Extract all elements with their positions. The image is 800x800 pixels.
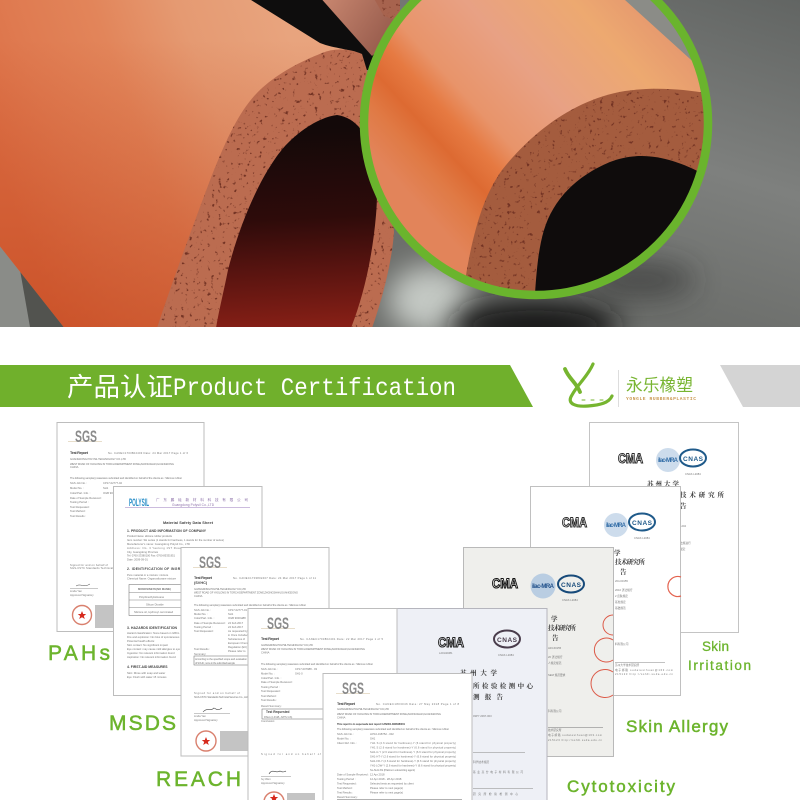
certificate: SGS report fourth sheet: Test Method :	[261, 694, 277, 698]
certificate: MSDS sheet: Tel: 0760-23380100 Fax: 0760-85331951	[127, 554, 176, 558]
certificate: skin allergy report back sheet: 电子邮箱 sudatesthuan@163.com	[615, 668, 674, 672]
certificate: skin irritation report: 1204	[680, 524, 686, 528]
magnified tube surface	[368, 0, 701, 276]
SGS logo: SGS	[267, 614, 289, 633]
certificate: SGS cytotoxicity report front sheet: Date of Sample Received :	[337, 772, 369, 776]
result box	[262, 709, 324, 719]
certificate: bluish report sheet: 03PY 2097-003	[473, 714, 492, 718]
signature: Ivy Wen	[261, 777, 271, 781]
certificate: MSDS sheet	[114, 486, 262, 696]
certificate: SGS report fourth sheet: Color/Part. Info. :	[261, 676, 282, 680]
certificate: SGS cytotoxicity report front sheet: SH1	[370, 736, 376, 740]
certificate: cytotoxicity report textured sheet: SEM 规范要求	[548, 673, 566, 677]
SGS logo	[261, 614, 295, 633]
certificate: PAHs SGS report: Test Method :	[70, 509, 86, 513]
certificate: SGS cytotoxicity report front sheet: SH1-G Y (2.6 stand for hardness)-Y (6.6 stand for physical property)	[370, 750, 456, 754]
certificate: skin allergy report back sheet	[530, 486, 681, 696]
signature	[261, 771, 291, 785]
certificate: MSDS sheet: Eye: Flush with water 15 minutes	[127, 675, 167, 679]
company logo	[565, 364, 696, 407]
certificate: REACH SVHC report: The following sample(s) was/were submitted and identified on behalf of the clients as : Silicone rubber	[194, 603, 306, 607]
certificate: MSDS sheet: Ingestion: No relevant information found	[127, 651, 175, 655]
CMA mark: CMA	[492, 575, 518, 591]
hero photo: silicone foam tubes	[0, 0, 800, 349]
certificate: MSDS sheet: Pure material or a mixture: mixture	[127, 573, 169, 577]
certificate: SGS cytotoxicity report front sheet: Test Results :	[337, 790, 353, 794]
certificate: MSDS sheet: 3. HAZARDS IDENTIFICATION	[127, 626, 178, 630]
certificate: MSDS sheet: Manufacturer's name: Guangdong Polysil Co., LTD	[127, 542, 190, 546]
green title band	[0, 365, 533, 407]
SGS logo	[193, 553, 227, 572]
certificate: REACH SVHC report: Regulation (EC)	[228, 645, 247, 649]
certificate: PAHs SGS report: Testing Period :	[70, 500, 89, 504]
certificate: REACH SVHC report: (SVHC)	[194, 581, 208, 585]
red stamps	[591, 615, 613, 698]
certificate: REACH SVHC report: in Once Included	[228, 633, 249, 637]
CMA mark: CMA	[618, 450, 643, 466]
certificate: MSDS sheet: 4. FIRST-AID MEASURES	[127, 665, 168, 669]
ingredients table: Polydimethylsiloxane	[139, 595, 165, 599]
certificate: SGS cytotoxicity report front sheet: This report is to supersede test report CAN001-090848/001	[337, 722, 406, 726]
certificate: MSDS sheet: Hazard classification: None based on GBCL	[127, 631, 180, 635]
certificate: REACH SVHC report: Model No. :	[194, 612, 208, 616]
ingredients table: Silicon Dioxide	[146, 602, 164, 606]
certificate: SGS cytotoxicity report front sheet: Client Ref. Info. :	[337, 741, 357, 745]
certificate: SGS report fourth sheet: Test Results :	[261, 698, 277, 702]
red stamp	[264, 792, 284, 800]
QR block	[287, 793, 315, 800]
certificate: skin allergy report back sheet: 技术研究所	[615, 557, 646, 566]
CNAS mark: CNAS L2084	[634, 536, 650, 540]
red stamp	[668, 576, 681, 596]
certificate: skin allergy report back sheet: 215123 http://ssfdt.suda.edu.cn	[615, 672, 674, 676]
logo mark	[565, 364, 612, 406]
certificate: MSDS sheet: Product Name: silicone rubber products	[127, 534, 173, 538]
certificate: SGS cytotoxicity report front sheet: YH1 S (2.6 stand for hardness)-Y (6.6 stand for physical property)	[370, 746, 456, 750]
SGS logo	[68, 427, 102, 446]
certificate: cytotoxicity report textured sheet: 215123 http://ssfdt.suda.edu.cn	[548, 738, 602, 742]
certificate: cytotoxicity report textured sheet: 20 济法规行	[548, 655, 563, 659]
certificate: SGS cytotoxicity report front sheet: Test Report	[337, 702, 356, 706]
CNAS mark	[558, 576, 584, 602]
certificate: SGS cytotoxicity report front sheet: 12 Apr 2018 - 28 Apr 2018	[370, 777, 402, 781]
ilac mark	[604, 513, 628, 537]
certificate: SGS cytotoxicity report front sheet: Selected tests as requested by client	[370, 782, 414, 786]
certificate: cytotoxicity report textured sheet: 电子邮箱 sudatesthuan@163.com	[548, 733, 603, 737]
certificate: REACH SVHC report: CP17-02777-01	[228, 608, 247, 612]
certificate: SGS report fourth sheet: Test Requested :	[261, 689, 281, 693]
certificate: MSDS sheet: Aspiration: No relevant information found	[127, 655, 176, 659]
section title: 产品认证	[67, 367, 173, 404]
certificate: cytotoxicity report textured sheet	[464, 548, 614, 756]
rear tube	[318, 0, 400, 56]
certificate: REACH SVHC report: European Chemicals	[228, 641, 254, 645]
certificate: MSDS sheet: Skin: Rinse with soap and water	[127, 671, 165, 675]
certificate: SGS report fourth sheet: Testing Period :	[261, 685, 280, 689]
certificate: bluish report sheet: 所检验检测中心	[473, 681, 534, 690]
certificate: REACH SVHC report: of SVHC, none in the submitted sample	[195, 661, 236, 665]
summary box	[194, 656, 249, 665]
certificate: SGS report fourth sheet: CHINA	[261, 650, 270, 654]
CMA mark: CMA	[562, 514, 587, 530]
certificate: SGS cytotoxicity report front sheet: SGS Job No. :	[337, 732, 354, 736]
certificate: skin allergy report back sheet: 苏州大学技术研究所	[615, 663, 639, 667]
lens backdrop	[625, 0, 692, 60]
front tube outer surface	[0, 0, 362, 330]
SGS logo: SGS	[75, 427, 97, 446]
certificate: SGS report fourth sheet: Signed for and on behalf of	[261, 752, 321, 756]
certificate: SGS cytotoxicity report front sheet: SH1-FR-Y (2.6 stand for hardness)-Y (6.6 stand for physical property)	[370, 759, 456, 763]
ilac mark	[656, 448, 680, 472]
certificate: SGS report fourth sheet: SGS Job No. :	[261, 667, 278, 671]
certificate: SGS report fourth sheet: WEST ROAD OF YAOLONG IN TORCH DEPARTMENT ZONE,ZHONGSHAN,GUANGDONG	[261, 647, 365, 651]
certificate: REACH SVHC report	[181, 548, 329, 756]
ilac mark: ilac-MRA	[532, 584, 555, 590]
QR block	[95, 605, 115, 628]
red stamp	[72, 606, 92, 624]
certificate: REACH SVHC report: OGB 9000H88	[228, 616, 246, 620]
certificate: PAHs SGS report: SGS-CSTC Standards Technical	[70, 566, 113, 570]
certificate: skin allergy report back sheet: 2 皮肤规定	[615, 594, 628, 598]
certificate: REACH SVHC report: Test Results :	[194, 647, 210, 651]
certificate: SGS report fourth sheet: Date of Sample Received :	[261, 680, 293, 684]
signature: Approved Signatory	[70, 593, 94, 597]
label: Skin Irritation	[688, 639, 751, 673]
CNAS mark	[494, 630, 520, 657]
certificate: cytotoxicity report textured sheet: A03-60155	[548, 646, 562, 650]
certificate: bluish report sheet: 测 报 告	[473, 692, 504, 701]
ilac mark: ilac-MRA	[658, 458, 679, 464]
certificate: MSDS sheet: 广东鹏硅新材料科技有限公司	[156, 497, 248, 503]
signature: Approved Signatory	[194, 718, 218, 722]
certificate: PAHs SGS report: Test Report	[70, 451, 89, 455]
certificate: bluish report sheet: 基业高分电子材料有限公司	[473, 770, 523, 774]
ingredients table: Silicone oil, Hydroxyl -terminated	[134, 610, 174, 614]
certificate: SGS cytotoxicity report front sheet: 12 Apr 2018	[370, 772, 385, 776]
certificate: skin allergy report back sheet: 基础规范	[615, 606, 626, 610]
certificate: bluish report sheet	[397, 608, 547, 800]
certificate: skin allergy report back sheet: 204-60155	[615, 579, 628, 583]
SGS logo	[336, 679, 370, 698]
certificate: skin irritation report	[590, 422, 738, 632]
certificate: PAHs SGS report: SGS Job No. :	[70, 481, 87, 485]
logo divider	[618, 370, 619, 407]
SGS logo: SGS	[199, 553, 221, 572]
certificate: SGS cytotoxicity report front sheet: Result Summary:	[337, 795, 358, 799]
certificate: SGS report fourth sheet	[248, 608, 397, 800]
certificate: skin allergy report back sheet: 2010 济法规行	[615, 588, 633, 592]
certificate: SGS report fourth sheet: GUANGDONG POLYSIL TECHNOLOGY CO.,LTD	[261, 643, 313, 647]
section title latin: Product Certification	[173, 374, 456, 403]
certificate: PAHs SGS report: CHINA	[70, 465, 79, 469]
certificate: PAHs SGS report: SH1	[103, 486, 109, 490]
certificate: MSDS sheet: Potential health effects:	[127, 639, 155, 643]
certificate: SGS cytotoxicity report front sheet: Please refer to next page(s)	[370, 786, 403, 790]
magnified hole	[535, 156, 697, 291]
certificate: PAHs SGS report: Date of Sample Received :	[70, 496, 102, 500]
certificate: SGS report fourth sheet: No. CANEC1703802401 Date: 22 Mar 2017 Page 1 of 5	[300, 637, 384, 641]
certificate: MSDS sheet: Item number: SH series (1 stands for hardness, 1 stands for the number of series)	[127, 538, 224, 542]
certificate: skin irritation report: 苏州大学	[647, 479, 680, 488]
certificate: REACH SVHC report: WEST ROAD OF YAOLONG IN TORCH DEPARTMENT ZONE,ZHONGSHAN,GUANGDONG	[194, 590, 298, 594]
certificate: bluish report sheet: L20140381	[439, 651, 453, 655]
tube end face foam ring	[157, 49, 394, 328]
logo english name: YONGLE RUBBER&PLASTIC	[626, 396, 696, 402]
certificate: SGS cytotoxicity report front sheet: Test Requested :	[337, 782, 357, 786]
certificate: skin allergy report back sheet: 基准规定	[615, 600, 626, 604]
label: Cytotoxicity: Cytotoxicity	[567, 777, 676, 796]
certificate: SGS cytotoxicity report front sheet: Model No. :	[337, 736, 351, 740]
label: Skin Irritation: Skin	[702, 639, 729, 654]
certificate: skin irritation report: 法规进行	[680, 541, 691, 545]
certificate: PAHs SGS report: No. CANEC1703802403 Date: 24 Mar 2017 Page 1 of 6	[108, 451, 188, 455]
CNAS mark: CNAS	[683, 456, 704, 463]
certificate: SGS report fourth sheet: Model No. :	[261, 672, 275, 676]
CNAS mark: CNAS L2084	[562, 598, 578, 602]
CNAS mark: CNAS L2084	[685, 472, 701, 476]
label: PAHs: PAHs	[48, 642, 110, 665]
certificate: REACH SVHC report: 24 Feb 2017	[228, 625, 244, 629]
certificate: REACH SVHC report: Summary:	[194, 652, 206, 656]
signature: Approved Signatory	[261, 781, 285, 785]
certificate: PAHs SGS report: Model No. :	[70, 486, 84, 490]
certificate: REACH SVHC report: Signed for and on behalf of	[194, 691, 240, 695]
certificate: REACH SVHC report: GUANGDONG POLYSIL TECHNOLOGY CO.,LTD	[194, 587, 246, 591]
certificate: MSDS sheet: Date: 2009-09-01	[127, 558, 148, 562]
certificate: skin irritation report: 规定	[680, 547, 686, 551]
certificate: PAHs SGS report: CP17-02777-02	[103, 481, 122, 485]
CNAS mark: CNAS	[632, 520, 653, 527]
tube inner hole	[216, 115, 377, 328]
certificate: REACH SVHC report: CHINA	[194, 594, 203, 598]
certificate: cytotoxicity report textured sheet: 技术研究所	[548, 623, 576, 632]
certificate: SGS report fourth sheet: Test Requested	[266, 710, 290, 714]
signature	[70, 584, 98, 597]
certificate: SGS report fourth sheet: Result Summary:	[261, 704, 282, 708]
certificate: MSDS sheet: Skin contact: No significant impact	[127, 643, 168, 647]
certificate: REACH SVHC report: Test Requested :	[194, 629, 214, 633]
certificate: SGS report fourth sheet: PAHs (LFGB, AfPS GS)	[264, 715, 292, 719]
certificate: PAHs SGS report: Color/Part. Info. :	[70, 491, 91, 495]
certificate: REACH SVHC report: Date of Sample Received :	[194, 621, 226, 625]
certificate: REACH SVHC report: Substances of	[228, 637, 245, 641]
SGS logo: SGS	[342, 679, 364, 698]
certificate: bluish report sheet: 科学技术规范	[473, 760, 489, 764]
certificate: bluish report sheet: 研究所检验检测中心	[473, 792, 518, 796]
certificate: PAHs SGS report	[57, 422, 204, 632]
certificate: MSDS sheet: City, Guangdong Province	[127, 550, 159, 554]
CNAS mark: CNAS	[497, 637, 518, 644]
certificate: REACH SVHC report: As requested by	[228, 629, 248, 633]
label: MSDS: MSDS	[109, 712, 176, 735]
logo name: 永乐橡塑	[626, 371, 693, 396]
signature: Linda Yan	[70, 589, 82, 593]
red stamp	[196, 731, 216, 751]
certificate: SGS cytotoxicity report front sheet: CHINA	[337, 716, 346, 720]
QR block	[220, 731, 248, 751]
certificate: MSDS sheet: Guangdong Polysil Co.,LTD	[172, 503, 215, 507]
signature	[194, 708, 230, 722]
certificate: SGS report fourth sheet: SH1-0	[295, 672, 303, 676]
certificate: MSDS sheet: Fire and explosion: No risks of spontaneous	[127, 635, 180, 639]
ingredients table: MONOSINEYE(NO MAME)	[138, 587, 171, 591]
certificate: SGS cytotoxicity report front sheet: WEST ROAD OF YAOLONG IN TORCH DEPARTMENT ZONE,ZHONGSHAN,GUANGDONG	[337, 712, 441, 716]
certificate: MSDS sheet: Material Safety Data Sheet	[163, 521, 214, 525]
certificate: SGS report fourth sheet: CP17-007988 - 03	[295, 667, 317, 671]
ilac mark: ilac-MRA	[606, 523, 627, 529]
ingredients table	[129, 584, 181, 616]
certificate: SGS cytotoxicity report front sheet	[323, 674, 472, 800]
certificate: cytotoxicity report textured sheet: 科有限公司	[548, 709, 562, 713]
certificate: skin allergy report back sheet: 料有限公司	[615, 642, 629, 646]
section header banner	[0, 365, 800, 407]
certificate: PAHs SGS report: The following sample(s) was/were submitted and identified on behalf of the clients as : Silicone rubber	[70, 476, 182, 480]
CNAS mark: CNAS	[561, 582, 582, 589]
certificate: MSDS sheet: POLYSIL	[129, 497, 149, 509]
certificate: PAHs SGS report: Test Results :	[70, 514, 86, 518]
label: Skin Irritation: Irritation	[688, 658, 751, 673]
certificate: skin irritation report: 告	[680, 501, 687, 510]
certificate: PAHs SGS report: Signed for and on behalf of	[70, 563, 108, 567]
certificate: PAHs SGS report: OGB 9000H88	[103, 491, 121, 495]
certificate: SGS report fourth sheet: The following sample(s) was/were submitted and identified on behalf of the clients as : Silicone rubber	[261, 662, 373, 666]
certificate: REACH SVHC report: SGS Job No. :	[194, 608, 211, 612]
certificate: REACH SVHC report: SH1	[228, 612, 234, 616]
certificate: PAHs SGS report: GUANGDONG POLYSIL TECHNOLOGY CO.,LTD	[70, 457, 126, 461]
CNAS mark: CNAS L2084	[498, 653, 514, 657]
certificate: REACH SVHC report: Please refer to	[228, 649, 246, 653]
certificate: SGS cytotoxicity report front sheet: No. CANEC1803046 Date: 27 May 2018 Page 1 of 8	[376, 702, 460, 706]
certificate: SGS cytotoxicity report front sheet: LIP10-018752 - 002	[370, 732, 394, 736]
certificate: SGS cytotoxicity report front sheet: Test Method :	[337, 786, 353, 790]
ilac mark	[530, 574, 556, 598]
certificate: MSDS sheet: 1. PRODUCT AND INFORMATION OF COMPANY	[127, 529, 207, 533]
certificate: SGS cytotoxicity report front sheet: The following sample(s) was/were submitted and identified on behalf of the clients as : Silicone rubber	[337, 727, 449, 731]
certificate: REACH SVHC report: Testing Period :	[194, 625, 213, 629]
grey backdrop	[0, 0, 800, 349]
certificate: REACH SVHC report: No. CANEC1703802407 Date: 24 Mar 2017 Page 1 of 11	[233, 576, 316, 580]
CNAS mark	[680, 450, 706, 476]
magnified detail lens	[360, 0, 712, 300]
lens green ring	[364, 0, 708, 295]
label: Skin Allergy: Skin Allergy	[626, 717, 728, 736]
certificate: SGS cytotoxicity report front sheet: SL-SH1-SS (Platinum vulcanizing agent)	[370, 768, 415, 772]
label: REACH: REACH	[156, 768, 241, 791]
certificate: MSDS sheet: Eye contact: may cause mild allergies to eye	[127, 647, 181, 651]
certificate: REACH SVHC report: SGS-CSTC Standards Technical Services Co., Ltd.	[194, 695, 248, 699]
signature: Linda Yan	[194, 714, 206, 718]
certificate: cytotoxicity report textured sheet: 告	[552, 633, 559, 642]
certificate: SGS cytotoxicity report front sheet: YH1-LOW-Y (2.6 stand for hardness)-Y (6.6 stand for physical property)	[370, 764, 456, 768]
certificate: cytotoxicity report textured sheet: 人规定规范	[548, 661, 562, 665]
certificate: SGS report fourth sheet: Conclusion:	[261, 719, 275, 723]
certificate: SGS cytotoxicity report front sheet: Please refer to next page(s)	[370, 790, 403, 794]
certificate: bluish report sheet: 苏州大学	[460, 668, 498, 677]
certificate: PAHs SGS report: WEST ROAD OF YAOLONG IN TORCH DEPARTMENT ZONE,ZHONGSHAN,GUANGDONG	[70, 462, 174, 466]
certificate: SGS report fourth sheet: Test Report	[261, 637, 280, 641]
certificate: cytotoxicity report textured sheet: 技术研究所	[548, 728, 562, 732]
certificate: MSDS sheet: Address: No. 3 Yaolong 1ST Road West, Torch Dev. Zone, Zhongshan City	[127, 546, 248, 550]
magnified foam cross-section	[466, 88, 704, 291]
certificate: PAHs SGS report: Test Requested :	[70, 505, 90, 509]
dark gap behind the tubes	[251, 0, 374, 70]
certificate: REACH SVHC report: Color/Part. Info. :	[194, 616, 215, 620]
certificate: SGS cytotoxicity report front sheet: YH1 S (2.6 stand for hardness)-Y (6 stand for physical property)	[370, 741, 456, 745]
certificate: MSDS sheet: 2. IDENTIFICATION OF INGREDIENTS	[127, 567, 198, 571]
certificate: REACH SVHC report: Test Report	[194, 576, 213, 580]
certificate: REACH SVHC report: 24 Feb 2017	[228, 621, 244, 625]
CMA mark: CMA	[438, 634, 464, 650]
certificate: cytotoxicity report textured sheet: 学	[551, 614, 558, 623]
certificate: SGS cytotoxicity report front sheet: GUANGDONG POLYSIL TECHNOLOGY CO.,LTD	[337, 707, 389, 711]
certificate: MSDS sheet: Chemical Name: Organosiloxane mixture	[127, 576, 176, 580]
grey corner shape	[720, 365, 800, 407]
certificate: skin irritation report: 技术研究所	[680, 490, 724, 499]
certificate: SGS cytotoxicity report front sheet: SH1-HT-Y (2.6 stand for hardness)-Y (6.6 stand for physical property)	[370, 754, 456, 758]
certificate: SGS cytotoxicity report front sheet: Testing Period :	[337, 777, 356, 781]
certificate: REACH SVHC report: According to the specified scope and evaluation	[195, 657, 248, 661]
CNAS mark	[629, 514, 655, 540]
certificate: skin allergy report back sheet: 告	[620, 567, 627, 576]
certificate: skin allergy report back sheet: 学	[614, 548, 621, 557]
